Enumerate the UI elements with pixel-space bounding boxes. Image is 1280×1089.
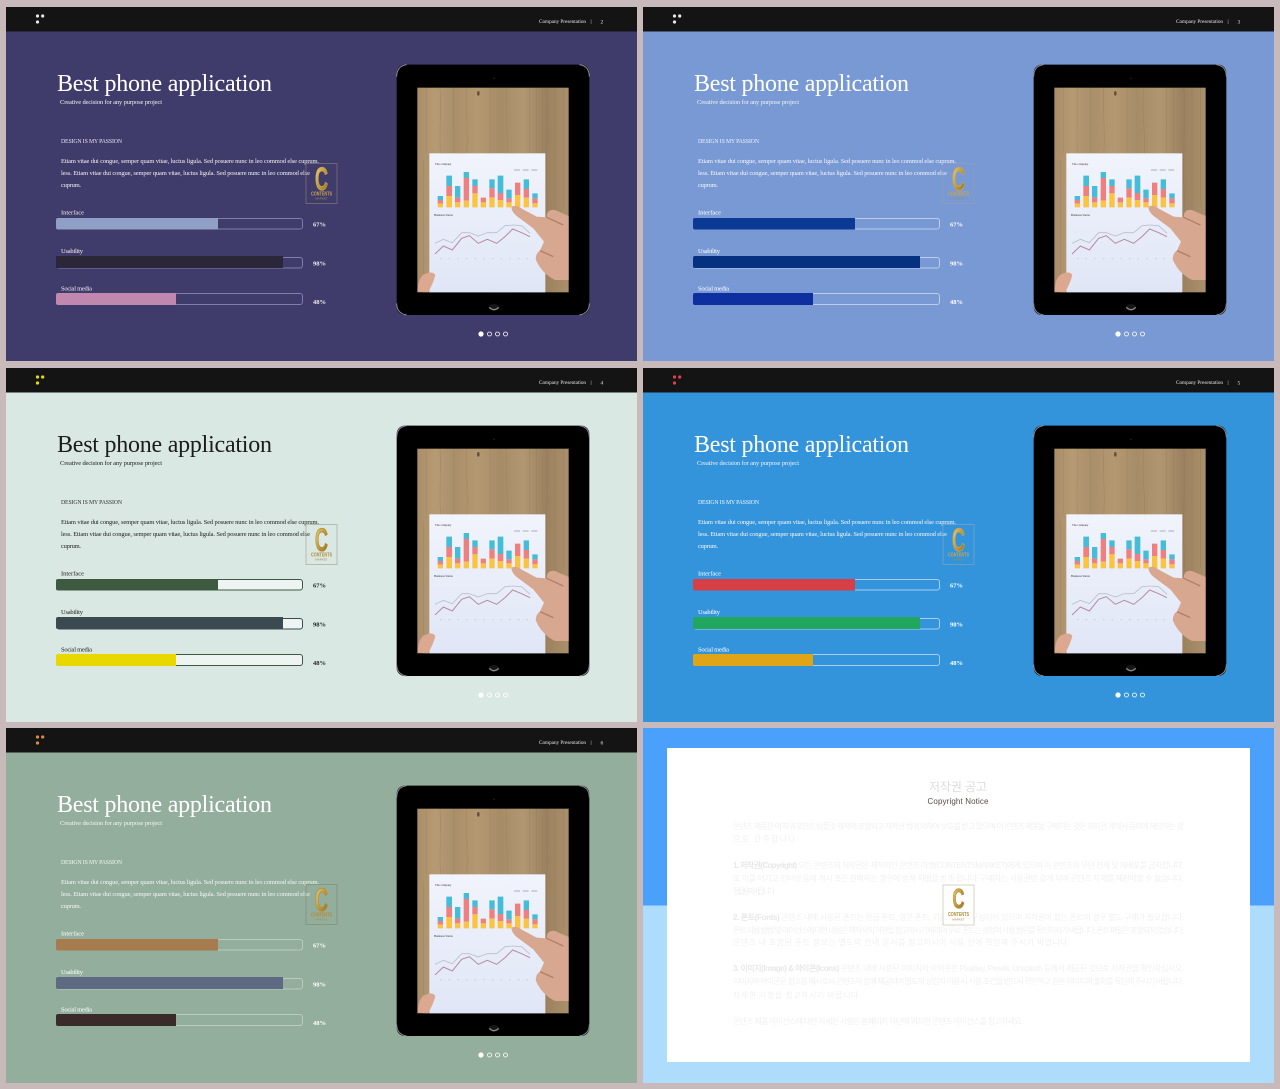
notice body text: 1. 저작권(Copyright) 모든 콘텐츠의 저작권은 제작자인 콘텐츠 마켓(CONTENTSMARKET)에게 있으며 이 콘텐츠의 무단 전재 및 재배포를 금지합니다. bbox=[733, 860, 1184, 870]
tablet with chart photo bbox=[397, 65, 589, 315]
body text: less. Etiam vitae dui congue, semper quam vitae, luctus ligula. Sed posuere nunc in leo commod else bbox=[698, 531, 947, 538]
body text: Etiam vitae dui congue, semper quam vitae, luctus ligula. Sed posuere nunc in leo commod else cuprum. bbox=[61, 879, 319, 886]
subtitle: Creative decision for any purpose project bbox=[60, 820, 162, 827]
body text bbox=[61, 519, 319, 550]
progress bar: Social media 48% bbox=[693, 646, 963, 667]
slide 5: sage green bbox=[6, 728, 637, 1083]
title: Best phone application bbox=[57, 432, 272, 458]
body text: cuprum. bbox=[698, 543, 718, 550]
body text: Etiam vitae dui congue, semper quam vitae, luctus ligula. Sed posuere nunc in leo commod else cuprum. bbox=[61, 519, 319, 526]
icon: logo dots bbox=[36, 375, 44, 385]
background lower band bbox=[643, 906, 1274, 1083]
notice body text: 콘텐츠 내 포함된 폰트 정보는 별도의 안내 문서를 참고하시어 사용 전에 확인해 주시기 바랍니다. bbox=[733, 937, 1070, 947]
watermark logo bbox=[306, 522, 337, 564]
notice body text: 폰트 사용 방법 및 라이선스에 대한 내용은 제작사의 약관을 참고하시기 바라며 무료 폰트는 상업적 사용 범위를 확인하시기 바랍니다. 폰트 파일은 포함되지 않습니다. bbox=[733, 925, 1184, 935]
tablet with chart photo bbox=[1034, 426, 1226, 676]
tablet with chart photo: Business Status bbox=[434, 934, 454, 938]
subtitle: Creative decision for any purpose project bbox=[697, 460, 799, 467]
section heading: DESIGN IS MY PASSION bbox=[698, 139, 760, 145]
watermark logo: C bbox=[315, 522, 328, 558]
progress bar: Social media 48% bbox=[56, 1006, 326, 1027]
subtitle: Creative decision for any purpose project bbox=[60, 460, 162, 467]
tablet with chart photo: Business Status bbox=[434, 213, 454, 217]
notice body text bbox=[733, 821, 1184, 1026]
header label: | bbox=[590, 380, 592, 386]
watermark logo bbox=[306, 882, 337, 924]
body text: less. Etiam vitae dui congue, semper quam vitae, luctus ligula. Sed posuere nunc in leo commod else bbox=[698, 170, 947, 177]
progress bar: Social media 48%: Social media bbox=[61, 286, 92, 292]
header bar bbox=[6, 7, 637, 32]
body text: less. Etiam vitae dui congue, semper quam vitae, luctus ligula. Sed posuere nunc in leo commod else bbox=[61, 891, 310, 898]
progress bar: Social media 48%: Social media bbox=[698, 646, 729, 654]
tablet with chart photo bbox=[1034, 65, 1226, 315]
body text: Etiam vitae dui congue, semper quam vitae, luctus ligula. Sed posuere nunc in leo commod else cuprum. bbox=[61, 158, 319, 165]
progress bar: Interface 67%: Interface bbox=[61, 570, 84, 578]
progress bar: Social media 48%: 48% bbox=[950, 299, 963, 306]
notice title: 저작권 공고 bbox=[929, 780, 987, 794]
tablet with chart photo: The company bbox=[435, 523, 452, 527]
background upper band bbox=[643, 728, 1274, 906]
slide 1: purple bbox=[6, 7, 637, 361]
progress bar: Interface 67%: Interface bbox=[698, 210, 721, 216]
notice body text: 으로 간주합니다. bbox=[733, 834, 799, 844]
notice body text: 콘텐츠 제품은 이 파워포인트 템플릿 제작에 포함되고 저작권 법에 의하여 보호를 받고 있으며 이 콘텐츠 제품을 구매하는 것은 저작권 계약서 동의에 해당하는 것 bbox=[733, 821, 1184, 831]
header label: | bbox=[1228, 380, 1229, 386]
body text: cuprum. bbox=[61, 182, 81, 189]
body text: Etiam vitae dui congue, semper quam vitae, luctus ligula. Sed posuere nunc in leo commod else cuprum. bbox=[698, 158, 956, 165]
body text bbox=[61, 158, 319, 189]
body text bbox=[698, 519, 956, 550]
watermark logo bbox=[306, 161, 337, 204]
watermark logo bbox=[943, 522, 974, 564]
header label: | bbox=[590, 19, 592, 25]
tablet with chart photo: The company bbox=[1072, 162, 1089, 166]
notice body text: 자세한 사항을 참고하시기 바랍니다. bbox=[733, 990, 861, 1000]
title: Best phone application bbox=[694, 432, 909, 458]
progress bar: Usability 98%: 98% bbox=[950, 260, 963, 268]
progress bar: Usability 98%: 98% bbox=[313, 982, 326, 988]
progress bar: Usability 98%: Usability bbox=[61, 248, 84, 255]
body text bbox=[61, 879, 319, 910]
notice body text: 콘텐츠 제품 라이선스에 대한 자세한 사항은 홈페이지 하단에 위치한 콘텐츠 라이선스를 참고하세요. bbox=[733, 1016, 1023, 1026]
progress bar: Usability 98%: Usability bbox=[61, 969, 84, 976]
progress bar: Interface 67% bbox=[693, 570, 963, 590]
notice body text: 이미지와 아이콘은 참고용 예시로서 콘텐츠와 함께 제공되며 별도의 상업적 이용 시 사용 조건을 반드시 확인하고 원본 이미지의 출처를 확인해 주시기 바랍니다. bbox=[733, 976, 1184, 986]
pagination dots bbox=[479, 1053, 508, 1057]
progress bar: Usability 98% bbox=[693, 248, 963, 268]
section heading: DESIGN IS MY PASSION bbox=[61, 139, 123, 145]
slide 2: periwinkle bbox=[643, 7, 1274, 361]
progress bar: Social media 48% bbox=[56, 646, 326, 667]
header label: 4 bbox=[600, 380, 604, 386]
header bar bbox=[643, 368, 1274, 392]
pagination dots bbox=[1116, 332, 1144, 336]
progress bar: Social media 48% bbox=[56, 286, 326, 306]
panel background bbox=[6, 728, 637, 1083]
progress bar: Interface 67%: 67% bbox=[313, 582, 326, 590]
watermark logo bbox=[943, 161, 974, 204]
watermark logo: MARKET bbox=[952, 196, 965, 200]
body text bbox=[698, 158, 956, 189]
progress bar: Interface 67% bbox=[56, 210, 326, 230]
progress bar: Interface 67%: 67% bbox=[950, 582, 963, 590]
tablet with chart photo: The company bbox=[1072, 523, 1089, 527]
progress bar: Usability 98% bbox=[693, 609, 963, 629]
watermark logo: CONTENTS bbox=[948, 912, 970, 918]
progress bar: Interface 67%: 67% bbox=[313, 942, 326, 950]
progress bar: Social media 48%: 48% bbox=[950, 660, 963, 667]
tablet with chart photo: The company bbox=[435, 162, 452, 166]
header label: Company Presentation bbox=[539, 380, 586, 386]
slide 3: pale mint bbox=[6, 368, 637, 722]
progress bar: Interface 67%: Interface bbox=[61, 930, 84, 938]
tablet with chart photo bbox=[397, 426, 589, 676]
pagination dots bbox=[479, 332, 508, 336]
progress bar: Social media 48%: Social media bbox=[61, 646, 92, 654]
icon: logo dots bbox=[36, 14, 44, 24]
pagination dots bbox=[1116, 693, 1144, 697]
progress bar: Social media 48%: Social media bbox=[698, 286, 729, 292]
watermark logo: MARKET bbox=[315, 918, 328, 922]
progress bar: Social media 48%: 48% bbox=[313, 299, 326, 306]
progress bar: Usability 98%: 98% bbox=[950, 622, 963, 628]
watermark logo: C bbox=[315, 882, 328, 918]
watermark logo: MARKET bbox=[952, 558, 965, 562]
slide 4: bright blue bbox=[643, 368, 1274, 722]
icon: logo dots bbox=[36, 735, 44, 745]
progress bar: Usability 98% bbox=[56, 609, 326, 629]
panel background bbox=[6, 7, 637, 361]
progress bar: Social media 48%: 48% bbox=[313, 660, 326, 667]
progress bar: Social media 48%: Social media bbox=[61, 1006, 92, 1014]
progress bar: Usability 98%: 98% bbox=[313, 622, 326, 628]
body text: less. Etiam vitae dui congue, semper quam vitae, luctus ligula. Sed posuere nunc in leo commod else bbox=[61, 531, 310, 538]
section heading: DESIGN IS MY PASSION bbox=[698, 500, 760, 506]
notice body text: 또 이를 어기고 인터넷 등에 게시 혹은 판매하는 경우에 법적 처벌을 받게 됩니다. 구매자는 사용권만 갖게 되며 콘텐츠 자체를 재판매할 수 없습니다. bbox=[733, 873, 1184, 883]
header bar bbox=[643, 7, 1274, 32]
header label: 5 bbox=[1238, 380, 1240, 386]
header bar bbox=[6, 728, 637, 752]
progress bar: Interface 67%: 67% bbox=[313, 222, 326, 228]
progress bar: Interface 67%: Interface bbox=[61, 210, 84, 216]
progress bar: Interface 67% bbox=[56, 930, 326, 950]
progress bar: Usability 98%: 98% bbox=[313, 260, 326, 268]
body text: less. Etiam vitae dui congue, semper quam vitae, luctus ligula. Sed posuere nunc in leo commod else bbox=[61, 170, 310, 177]
panel background bbox=[643, 368, 1274, 722]
watermark logo: C bbox=[315, 161, 328, 197]
watermark logo: CONTENTS bbox=[311, 912, 333, 918]
progress bar: Social media 48%: 48% bbox=[313, 1020, 326, 1027]
watermark logo: MARKET bbox=[315, 196, 328, 200]
progress bar: Usability 98%: Usability bbox=[698, 609, 721, 616]
tablet with chart photo: The company bbox=[435, 883, 452, 887]
header bar bbox=[6, 368, 637, 392]
header label: 2 bbox=[600, 20, 604, 26]
watermark logo: MARKET bbox=[315, 558, 328, 562]
watermark logo bbox=[943, 883, 974, 925]
notice subtitle: Copyright Notice bbox=[928, 797, 989, 806]
section heading: DESIGN IS MY PASSION bbox=[61, 860, 123, 866]
header label: | bbox=[1228, 19, 1229, 25]
panel background bbox=[6, 368, 637, 722]
title: Best phone application bbox=[57, 71, 272, 97]
progress bar: Usability 98% bbox=[56, 248, 326, 268]
white notice card bbox=[667, 748, 1250, 1062]
header label: Company Presentation bbox=[539, 740, 586, 746]
watermark logo: CONTENTS bbox=[948, 552, 970, 558]
progress bar: Interface 67%: 67% bbox=[950, 222, 963, 228]
body text: Etiam vitae dui congue, semper quam vitae, luctus ligula. Sed posuere nunc in leo commod else cuprum. bbox=[698, 519, 956, 526]
progress bar: Usability 98%: Usability bbox=[61, 609, 84, 616]
header label: Company Presentation bbox=[539, 19, 586, 25]
tablet with chart photo: Business Status bbox=[434, 574, 454, 578]
tablet with chart photo bbox=[397, 786, 589, 1036]
pagination dots bbox=[479, 693, 508, 697]
header label: 3 bbox=[1238, 20, 1240, 26]
progress bar: Interface 67% bbox=[56, 570, 326, 590]
watermark logo: CONTENTS bbox=[311, 192, 333, 198]
tablet with chart photo: Business Status bbox=[1071, 574, 1091, 578]
panel: copyright notice bbox=[643, 728, 1274, 1083]
watermark logo: CONTENTS bbox=[948, 192, 970, 198]
panel background bbox=[643, 7, 1274, 361]
notice body text: 3. 이미지(Image) & 아이콘(Icons) 콘텐츠 내에 사용된 이미지와 아이콘은 Pixabay, Pexels, Unsplash 등에서 제공된 것으로 저작권을 확인하십시오. bbox=[733, 963, 1184, 973]
icon: logo dots bbox=[673, 14, 681, 24]
progress bar: Interface 67% bbox=[693, 210, 963, 230]
section heading: DESIGN IS MY PASSION bbox=[61, 500, 123, 506]
title: Best phone application bbox=[694, 71, 909, 97]
tablet with chart photo: Business Status bbox=[1071, 213, 1091, 217]
body text: cuprum. bbox=[61, 543, 81, 550]
header label: Company Presentation bbox=[1176, 380, 1223, 386]
subtitle: Creative decision for any purpose project bbox=[697, 99, 799, 106]
progress bar: Social media 48% bbox=[693, 286, 963, 306]
header label: Company Presentation bbox=[1176, 19, 1223, 25]
subtitle: Creative decision for any purpose project bbox=[60, 99, 162, 106]
title: Best phone application bbox=[57, 792, 272, 818]
progress bar: Usability 98%: Usability bbox=[698, 248, 721, 255]
body text: cuprum. bbox=[61, 903, 81, 910]
notice body text: 점을 유의 바랍니다. bbox=[733, 886, 776, 896]
watermark logo: C bbox=[952, 883, 964, 914]
progress bar: Usability 98% bbox=[56, 969, 326, 989]
progress bar: Interface 67%: Interface bbox=[698, 570, 721, 578]
body text: cuprum. bbox=[698, 182, 718, 189]
header label: 6 bbox=[600, 740, 604, 746]
watermark logo: C bbox=[952, 522, 965, 558]
icon: logo dots bbox=[673, 375, 681, 385]
notice body text: 2. 폰트(Fonts) 콘텐츠 내에 사용된 폰트는 한글 폰트, 영문 폰트, 기본 폰트로 구성되어 있으며 저작권이 있는 폰트의 경우 별도 구매가 필요합니다. bbox=[733, 912, 1184, 922]
watermark logo: MARKET bbox=[952, 918, 965, 922]
header label: | bbox=[590, 740, 592, 746]
watermark logo: C bbox=[952, 161, 965, 197]
watermark logo: CONTENTS bbox=[311, 552, 333, 558]
